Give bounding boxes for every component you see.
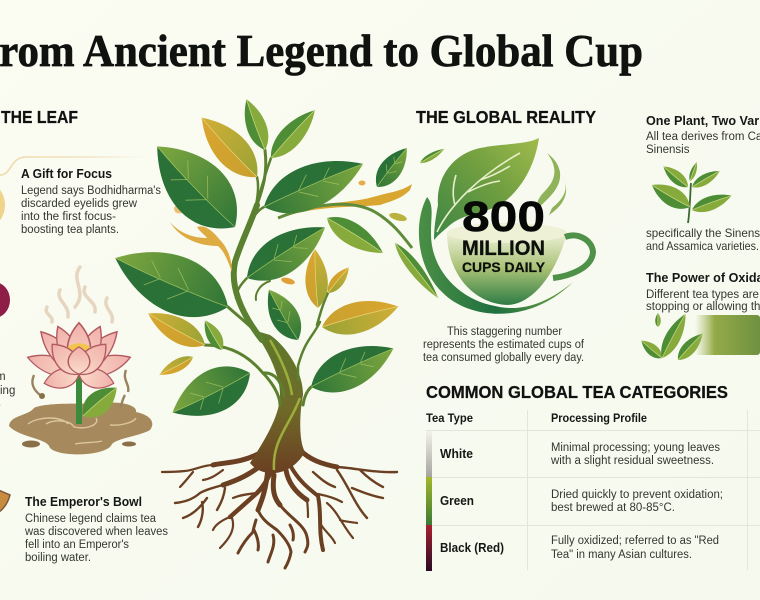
leaves <box>104 96 446 432</box>
text block: a gift for focus: discarded eyelids grew <box>21 198 138 210</box>
row: white: White <box>440 447 473 461</box>
icon: emperor's bowl <box>0 489 10 514</box>
text block: the emperor's bowl: was discovered when leaves <box>24 526 168 538</box>
swirl <box>419 197 573 314</box>
number: 800 <box>462 193 545 241</box>
text block: clipped lotus caption <box>0 351 15 409</box>
row: black (red): Fully oxidized; referred to as "Red <box>551 535 719 547</box>
icon: tea cup with leaf <box>419 138 593 314</box>
stems <box>205 150 328 405</box>
icon: golden circle with connector <box>0 157 150 231</box>
text block: global reality caption: represents the estimated cups of <box>423 339 585 351</box>
table header: Processing Profile <box>551 411 647 425</box>
text block: the emperor's bowl: Chinese legend claims tea <box>25 513 157 525</box>
text block: varieties <box>646 227 760 253</box>
row: black (red): Black (Red) <box>440 541 504 555</box>
panel: the leaf legends <box>0 107 168 564</box>
icon: tea sprig <box>647 161 734 223</box>
bowl <box>447 233 567 305</box>
row: green: Green <box>440 494 474 508</box>
table grid <box>426 410 760 570</box>
text block: a gift for focus: Legend says Bodhidharma's <box>21 185 161 197</box>
number: MILLION <box>462 237 545 260</box>
handle <box>553 235 593 278</box>
tea plant illustration <box>104 96 446 568</box>
icon: lotus in mud <box>9 267 152 454</box>
row: green <box>426 477 723 525</box>
mud drips <box>32 370 128 408</box>
text block: a gift for focus: into the first focus- <box>21 211 116 223</box>
text block: the emperor's bowl: boiling water. <box>25 552 91 564</box>
number: CUPS DAILY <box>462 259 546 275</box>
leaf <box>434 138 539 240</box>
text block: plant intro <box>646 131 760 156</box>
text block: a gift for focus <box>21 167 161 236</box>
row: green: best brewed at 80-85°C. <box>551 502 675 514</box>
heading: the global reality: THE GLOBAL REALITY <box>416 107 596 127</box>
text block: a gift for focus: boosting tea plants. <box>21 224 119 236</box>
text block: the emperor's bowl: fell into an Emperor's <box>25 539 129 551</box>
text block: the emperor's bowl <box>24 495 168 564</box>
table header <box>426 411 647 425</box>
heading: categories: COMMON GLOBAL TEA CATEGORIES <box>426 382 728 402</box>
row: white: Minimal processing; young leaves <box>551 442 720 454</box>
number <box>462 193 546 275</box>
text block: oxidation <box>646 289 760 313</box>
text block: global reality caption: tea consumed globally every day. <box>423 352 584 364</box>
text block: global reality caption: This staggering number <box>447 326 562 338</box>
row: green: Dried quickly to prevent oxidation; <box>551 489 723 501</box>
table header: Tea Type <box>426 411 473 425</box>
oxidation gradient bar <box>695 315 760 355</box>
text block: the emperor's bowl: The Emperor's Bowl <box>25 495 142 509</box>
small leaf <box>76 379 124 425</box>
text block: a gift for focus: A Gift for Focus <box>21 167 112 181</box>
heading: the leaf: THE LEAF <box>1 107 78 127</box>
petals <box>25 323 133 392</box>
row: black (red) <box>426 525 719 571</box>
text block: global reality caption <box>423 326 585 364</box>
mud puddle <box>9 403 152 454</box>
steam <box>46 267 112 322</box>
panel: the global reality <box>416 107 596 364</box>
text block: plant intro: Sinensis <box>646 144 690 156</box>
gold and green swooshes <box>170 180 412 286</box>
icon: maroon bud <box>0 282 10 318</box>
row: white <box>426 431 720 477</box>
row: black (red): Tea" in many Asian cultures. <box>551 549 692 561</box>
trunk <box>250 330 305 473</box>
panel: one plant, two varieties <box>638 114 760 364</box>
panel: common global tea categories <box>426 382 760 571</box>
roots <box>162 450 397 568</box>
stem <box>76 376 82 424</box>
icon: oxidation leaves <box>638 310 707 364</box>
row: white: with a slight residual sweetness. <box>550 455 714 467</box>
text block: clipped lotus caption: ing <box>0 385 15 397</box>
steam <box>537 153 566 215</box>
